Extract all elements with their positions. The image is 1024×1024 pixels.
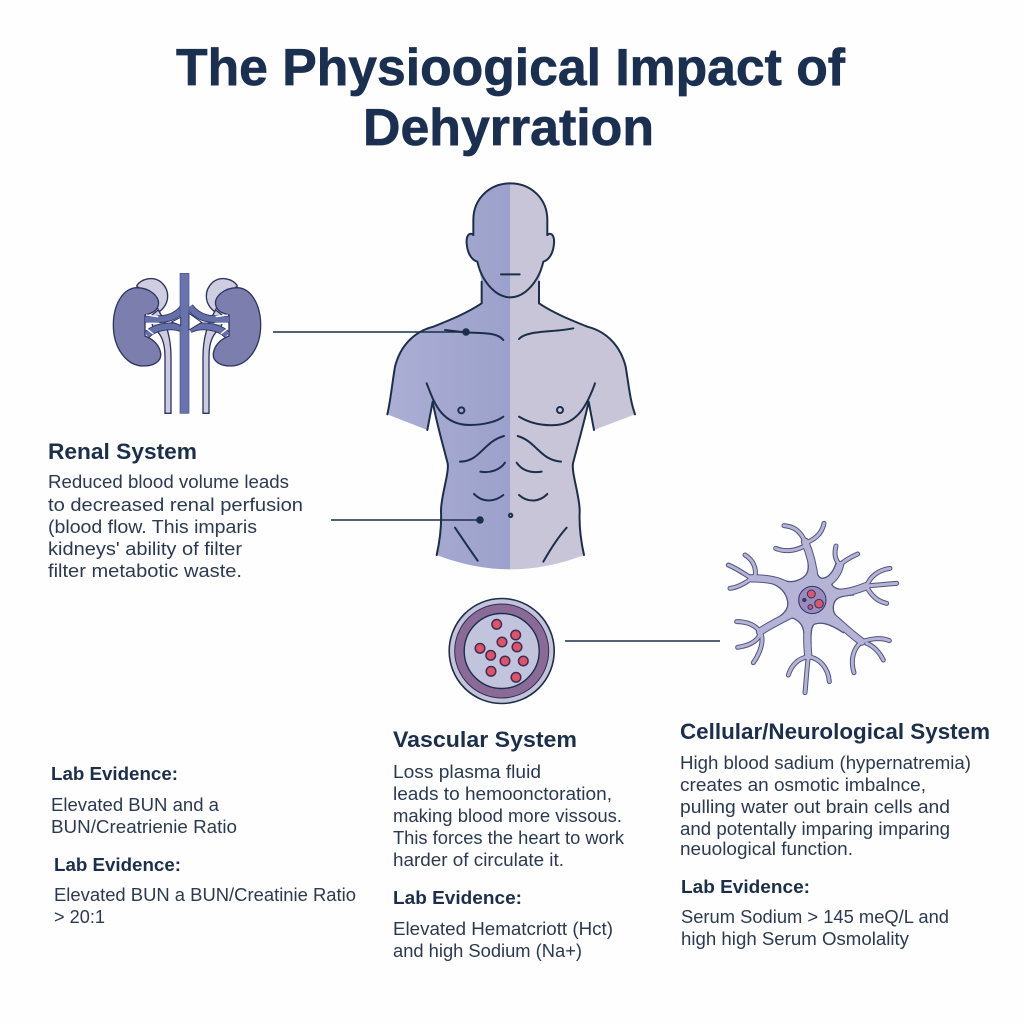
text block: vascular system: Lab Evidence: <box>393 887 522 908</box>
text block: renal lab evidence 1 <box>51 763 237 837</box>
text block: renal lab evidence 1: Elevated BUN and a <box>51 794 220 815</box>
text block: vascular system <box>393 727 625 961</box>
connector: renal text to abdomen <box>331 519 480 521</box>
nucleus <box>799 586 826 614</box>
text block: vascular system: This forces the heart to work <box>393 827 625 848</box>
text block: vascular system: leads to hemoonctoration, <box>393 783 612 804</box>
right kidney with adrenal and ureter <box>203 279 261 413</box>
icon: blood vessel cross-section <box>449 598 554 704</box>
text block: cellular/neurological system: pulling water out brain cells and <box>680 796 950 817</box>
text block: vascular system: and high Sodium (Na+) <box>393 940 582 961</box>
text block: renal system: to decreased renal perfusion <box>48 494 303 515</box>
body figure <box>387 183 635 569</box>
text block: renal lab evidence 1: Lab Evidence: <box>51 763 178 784</box>
text block: cellular/neurological system: Lab Evidence: <box>681 876 810 897</box>
text block: renal lab evidence 2: Elevated BUN a BUN/Creatinie Ratio <box>54 884 356 905</box>
text block: renal system <box>48 439 303 581</box>
text block: renal system: kidneys' ability of filter <box>48 538 242 559</box>
left kidney with adrenal and ureter <box>113 279 171 413</box>
icon: neuron <box>728 523 897 693</box>
text block: cellular/neurological system: neuological function. <box>680 838 853 859</box>
text block: renal system: Renal System <box>48 439 197 464</box>
title <box>176 39 846 157</box>
text block: renal system: Reduced blood volume leads <box>48 471 289 492</box>
text block: cellular/neurological system: and potentally imparing imparing <box>680 818 950 839</box>
text block: cellular/neurological system: Cellular/Neurological System <box>680 719 990 744</box>
text block: renal system: (blood flow. This imparis <box>48 516 257 537</box>
title: The Physioogical Impact of <box>176 39 846 97</box>
text block: vascular system: harder of circulate it. <box>393 849 564 870</box>
connector: kidneys to body <box>273 331 466 333</box>
connector dot on abdomen <box>476 516 484 524</box>
text block: cellular/neurological system: creates an osmotic imbalnce, <box>680 774 926 795</box>
connector dot on chest <box>462 328 470 336</box>
text block: renal system: filter metabotic waste. <box>48 560 242 581</box>
body outline and anatomy lines <box>387 183 635 562</box>
text block: renal lab evidence 2: Lab Evidence: <box>54 854 181 875</box>
body right half <box>510 183 635 569</box>
body left half <box>387 183 510 569</box>
renal vessels <box>145 307 229 335</box>
connector: vessel to neuron <box>565 640 720 642</box>
text block: renal lab evidence 2: > 20:1 <box>54 906 105 927</box>
text block: vascular system: making blood more vissous. <box>393 805 622 826</box>
text block: renal lab evidence 2 <box>54 854 356 927</box>
text block: cellular/neurological system <box>680 719 990 949</box>
text block: cellular/neurological system: high high Serum Osmolality <box>681 928 910 949</box>
text block: vascular system: Elevated Hematcriott (Hct) <box>393 918 613 939</box>
text block: vascular system: Vascular System <box>393 727 577 752</box>
text block: vascular system: Loss plasma fluid <box>393 761 541 782</box>
text block: cellular/neurological system: High blood sadium (hypernatremia) <box>680 752 971 773</box>
text block: renal lab evidence 1: BUN/Creatrienie Ratio <box>51 816 237 837</box>
text block: cellular/neurological system: Serum Sodium > 145 meQ/L and <box>681 906 949 927</box>
icon: kidneys <box>113 273 261 413</box>
aorta <box>180 273 189 413</box>
title: Dehyrration <box>363 99 654 157</box>
